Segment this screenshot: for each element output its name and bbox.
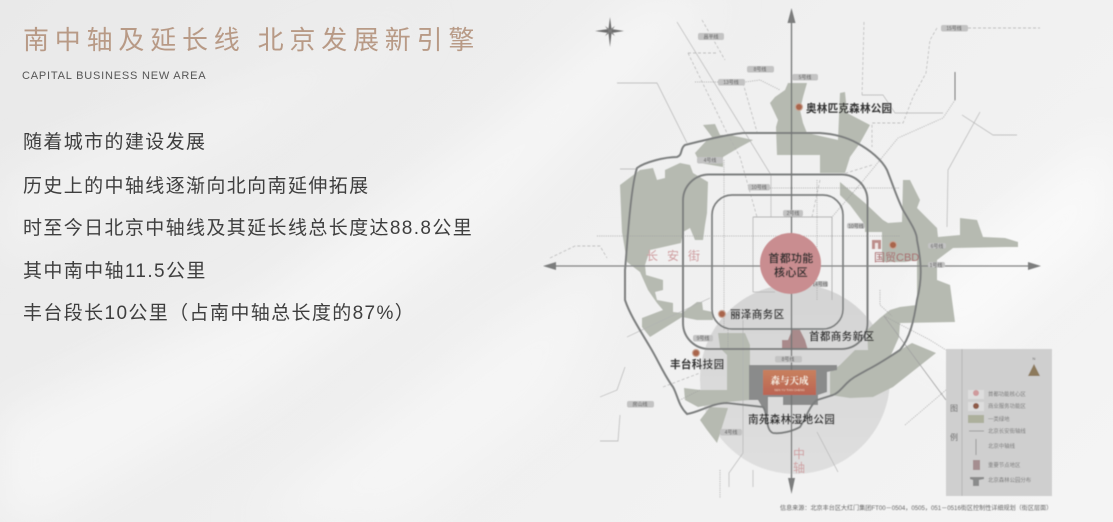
source note: 信息来源：北京丰台区大红门集团FT00－0504，0505，051－0516街区控制性详细规划（街区层面） (780, 504, 1052, 512)
subtitle: CAPITAL BUSINESS NEW AREA (22, 70, 206, 82)
place names: 丰台科技园 (670, 358, 724, 371)
legend panel: 北京森林公园分布 (988, 476, 1032, 484)
text line 5: 丰台段长10公里（占南中轴总长度的87%） (23, 303, 415, 324)
icon: compass (595, 17, 624, 47)
metro line labels: 10号线 (848, 223, 864, 230)
metro line labels: 1号线 (930, 262, 942, 269)
legend panel: 北京中轴线 (988, 442, 1016, 450)
core district label: 首都功能 (768, 251, 814, 265)
metro line labels: 4号线 (704, 157, 716, 164)
place names: 首都商务新区 (809, 330, 874, 343)
metro line labels: 8号线 (782, 356, 794, 363)
core district circle (760, 233, 821, 294)
green spaces (620, 83, 1018, 443)
place names (670, 102, 919, 426)
South axis label: 中 (793, 446, 805, 461)
place names: 奥林匹克森林公园 (806, 102, 892, 115)
legend panel: N (1033, 356, 1036, 361)
project label: SEN YU TIAN CHENG (774, 388, 805, 392)
metro line labels: 6号线 (931, 243, 943, 250)
place names: 国贸CBD (874, 251, 919, 264)
text line 3: 时至今日北京中轴线及其延长线总长度达88.8公里 (23, 218, 473, 239)
text line 4: 其中南中轴11.5公里 (23, 261, 207, 282)
legend panel: 商业服务功能区 (988, 402, 1026, 410)
text line 2: 历史上的中轴线逐渐向北向南延伸拓展 (23, 176, 369, 197)
metro line labels: 10号线 (751, 184, 767, 191)
text line 1: 随着城市的建设发展 (23, 132, 206, 153)
axis arrows (543, 8, 1041, 494)
place names: 南苑森林湿地公园 (748, 413, 835, 426)
location dots (692, 104, 896, 356)
legend panel: 一类绿地 (988, 415, 1010, 423)
metro line labels: 5号线 (799, 74, 811, 81)
Chang'an Avenue label: 长安街 (646, 248, 709, 263)
legend panel: 首都功能核心区 (988, 390, 1026, 398)
project label: 森与天成 (770, 375, 809, 387)
title: 南中轴及延长线 北京发展新引擎 (23, 25, 480, 55)
icon: CBD tower (872, 240, 881, 249)
project label (763, 370, 816, 395)
road and metro lines (550, 20, 1040, 498)
metro line labels: 2号线 (787, 210, 799, 217)
southern area circle (700, 284, 890, 474)
metro line labels: 14号线 (812, 281, 828, 288)
metro line labels: 8号线 (754, 66, 766, 73)
metro line labels: 4号线 (725, 429, 737, 436)
metro line labels (627, 25, 968, 436)
legend panel: 重要节点地区 (988, 461, 1021, 469)
metro line labels: 13号线 (723, 79, 739, 86)
legend panel (946, 349, 1052, 496)
metro line labels: 9号线 (697, 335, 709, 342)
metro line labels: 昌平线 (703, 34, 719, 40)
ring roads (625, 133, 921, 433)
metro line labels: 15号线 (946, 25, 962, 32)
legend panel: 北京长安街轴线 (988, 427, 1026, 435)
dark block: Senyu Tiancheng site (749, 365, 837, 417)
pink block: historic area (782, 330, 808, 350)
place names: 丽泽商务区 (730, 308, 785, 321)
metro line labels: 房山线 (632, 401, 648, 408)
legend panel: 例 (950, 432, 958, 442)
core district label: 核心区 (774, 265, 808, 279)
legend panel: 图 (950, 404, 958, 413)
South axis label: 轴 (793, 460, 805, 475)
